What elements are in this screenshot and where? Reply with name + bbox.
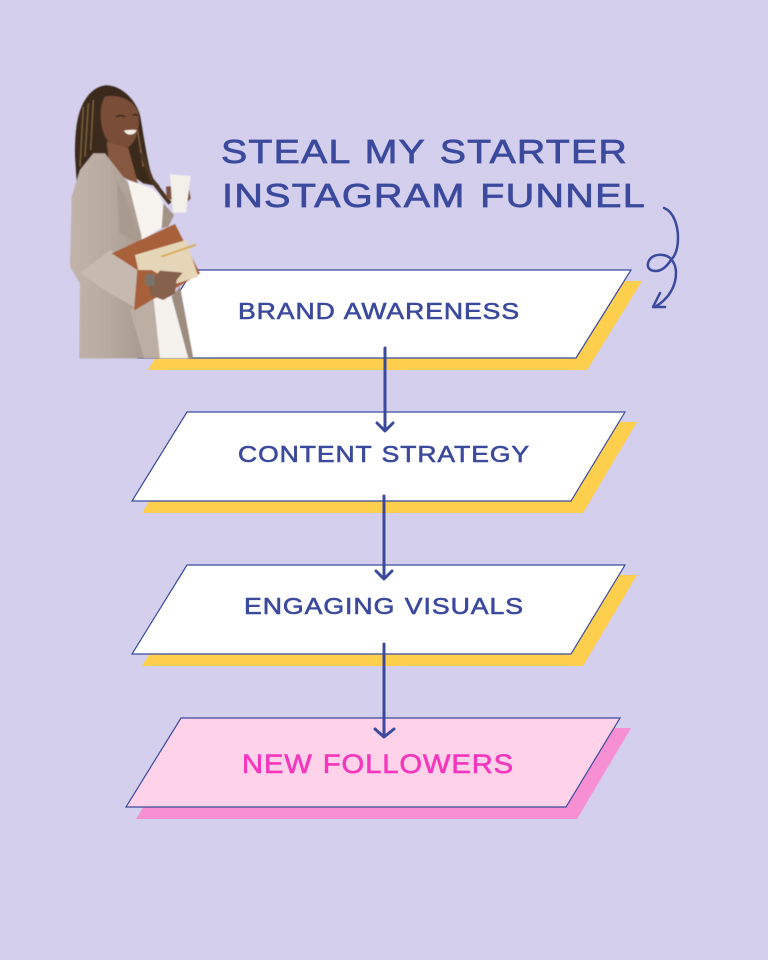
arrow: engaging visuals to new followers [375,644,394,737]
arrow: content strategy to engaging visuals [376,496,392,579]
hair [75,85,160,187]
hand and watch [149,271,183,300]
cream notebook [135,240,198,284]
hand behind cup [166,185,191,203]
step 2: content strategy [132,412,637,513]
white top [128,180,165,240]
face [101,96,139,149]
pen [161,245,196,257]
step 3: engaging visuals: ENGAGING VISUALS [244,593,524,619]
neck and chest [107,142,138,185]
hair highlights [80,100,150,177]
white trousers [150,297,192,358]
icon: curly arrow [648,208,678,307]
smile [124,130,137,135]
photo: woman holding notebook and coffee [70,85,200,358]
step 1: brand awareness: BRAND AWARENESS [238,298,520,324]
title [221,133,646,214]
arrow: brand awareness to content strategy [377,348,393,431]
title: INSTAGRAM FUNNEL [222,177,646,214]
brown folder [112,224,200,311]
step 4: new followers [126,718,631,819]
step 3: engaging visuals [132,565,637,666]
coffee cup [170,174,191,213]
title: STEAL MY STARTER [221,133,628,170]
coat right panel [172,287,193,358]
step 2: content strategy: CONTENT STRATEGY [238,441,530,467]
coat lapel and sleeve folds [117,180,140,243]
eyes [116,115,138,117]
coat [70,153,145,358]
step 1: brand awareness [138,270,642,370]
step 4: new followers: NEW FOLLOWERS [242,749,514,779]
right-side dreadlocks [142,153,170,203]
